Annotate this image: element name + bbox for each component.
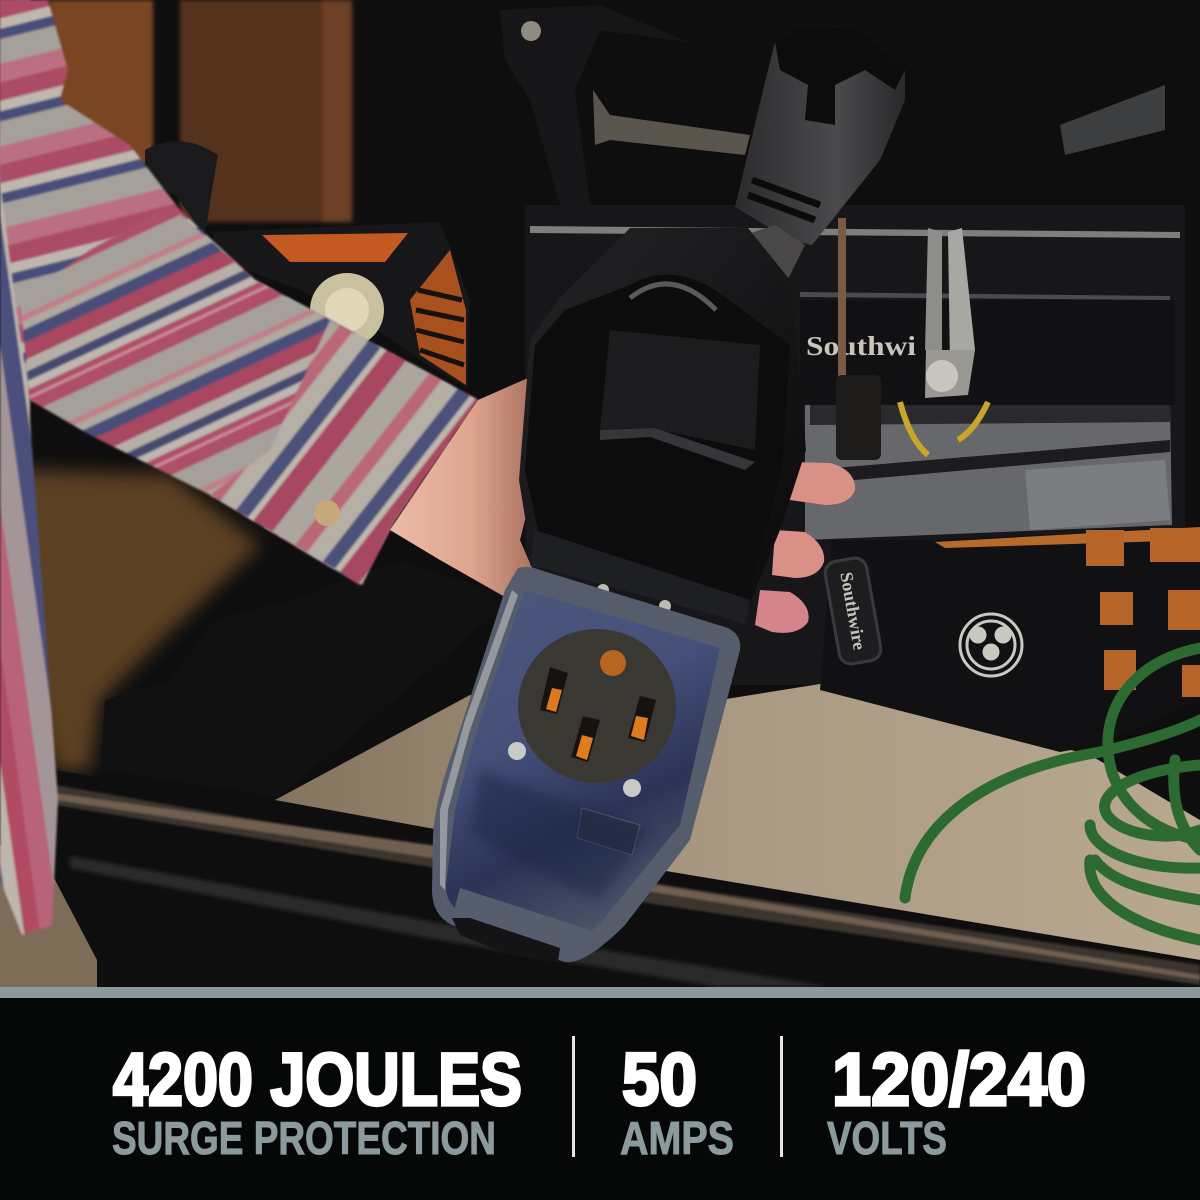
spec: amps xyxy=(620,1038,734,1164)
fingers xyxy=(755,462,855,633)
spec: surge protection: SURGE PROTECTION xyxy=(112,1112,496,1164)
lid highlight xyxy=(600,428,755,470)
spec: volts: 120/240 xyxy=(832,1038,1086,1121)
lid hinge xyxy=(530,530,750,625)
clear base inner xyxy=(446,590,720,945)
spec: surge protection: 4200 JOULES xyxy=(113,1038,522,1121)
left slot xyxy=(540,667,568,714)
rating label xyxy=(577,808,640,855)
spec: amps: 50 xyxy=(622,1038,697,1121)
right slot xyxy=(628,696,656,742)
lower left wood ground xyxy=(15,470,260,770)
divider two xyxy=(780,1036,783,1157)
surge protector device xyxy=(432,25,905,962)
lid inner recess xyxy=(525,274,790,562)
cuff button xyxy=(314,500,340,526)
tool organiser bag xyxy=(525,205,1185,685)
ground hole xyxy=(600,650,626,676)
green extension cable xyxy=(905,648,1200,940)
spec: volts: VOLTS xyxy=(827,1112,947,1164)
shirt torso xyxy=(0,0,58,935)
khaki trousers xyxy=(0,845,97,987)
base light edge xyxy=(440,590,518,890)
open lid xyxy=(519,228,806,615)
black band xyxy=(0,998,1200,1200)
lid centre panel xyxy=(600,330,760,450)
Southwire glove tag: Southwire xyxy=(836,571,870,651)
spec: volts xyxy=(827,1038,1086,1164)
hand xyxy=(390,378,535,597)
shirt cuff xyxy=(210,320,478,585)
outlet face xyxy=(518,629,676,783)
black power strip xyxy=(101,696,117,759)
spec: amps: AMPS xyxy=(620,1112,734,1164)
grey strip xyxy=(0,987,1200,998)
plug grip lines xyxy=(748,180,820,220)
shine on base xyxy=(470,770,650,900)
orange and black glove bag xyxy=(820,527,1200,752)
ledge xyxy=(55,770,1200,987)
screwdriver and pliers xyxy=(836,218,988,460)
lid hinge arc xyxy=(630,284,716,310)
shirt sleeve forearm xyxy=(20,205,478,585)
spec band xyxy=(0,987,1200,1200)
plug cap xyxy=(775,25,905,125)
Southwire glove tag xyxy=(823,556,883,666)
wood floor xyxy=(275,684,1200,960)
base bottom strip xyxy=(454,888,590,945)
clear base xyxy=(432,567,740,962)
divider one xyxy=(572,1036,575,1157)
plug head xyxy=(735,25,905,245)
bottom slot xyxy=(571,716,600,762)
plug neck xyxy=(752,225,805,278)
coil logo xyxy=(960,614,1022,676)
screws xyxy=(508,742,641,797)
wood wall panels xyxy=(48,0,352,222)
shirt sleeve upper xyxy=(0,0,330,440)
spec: surge protection xyxy=(112,1038,522,1164)
Southwire logo on bag: Southwi xyxy=(806,331,917,361)
bottom latch xyxy=(452,918,560,962)
hinge screws xyxy=(597,584,671,612)
tools on wall xyxy=(500,5,1165,205)
work light xyxy=(145,141,470,388)
